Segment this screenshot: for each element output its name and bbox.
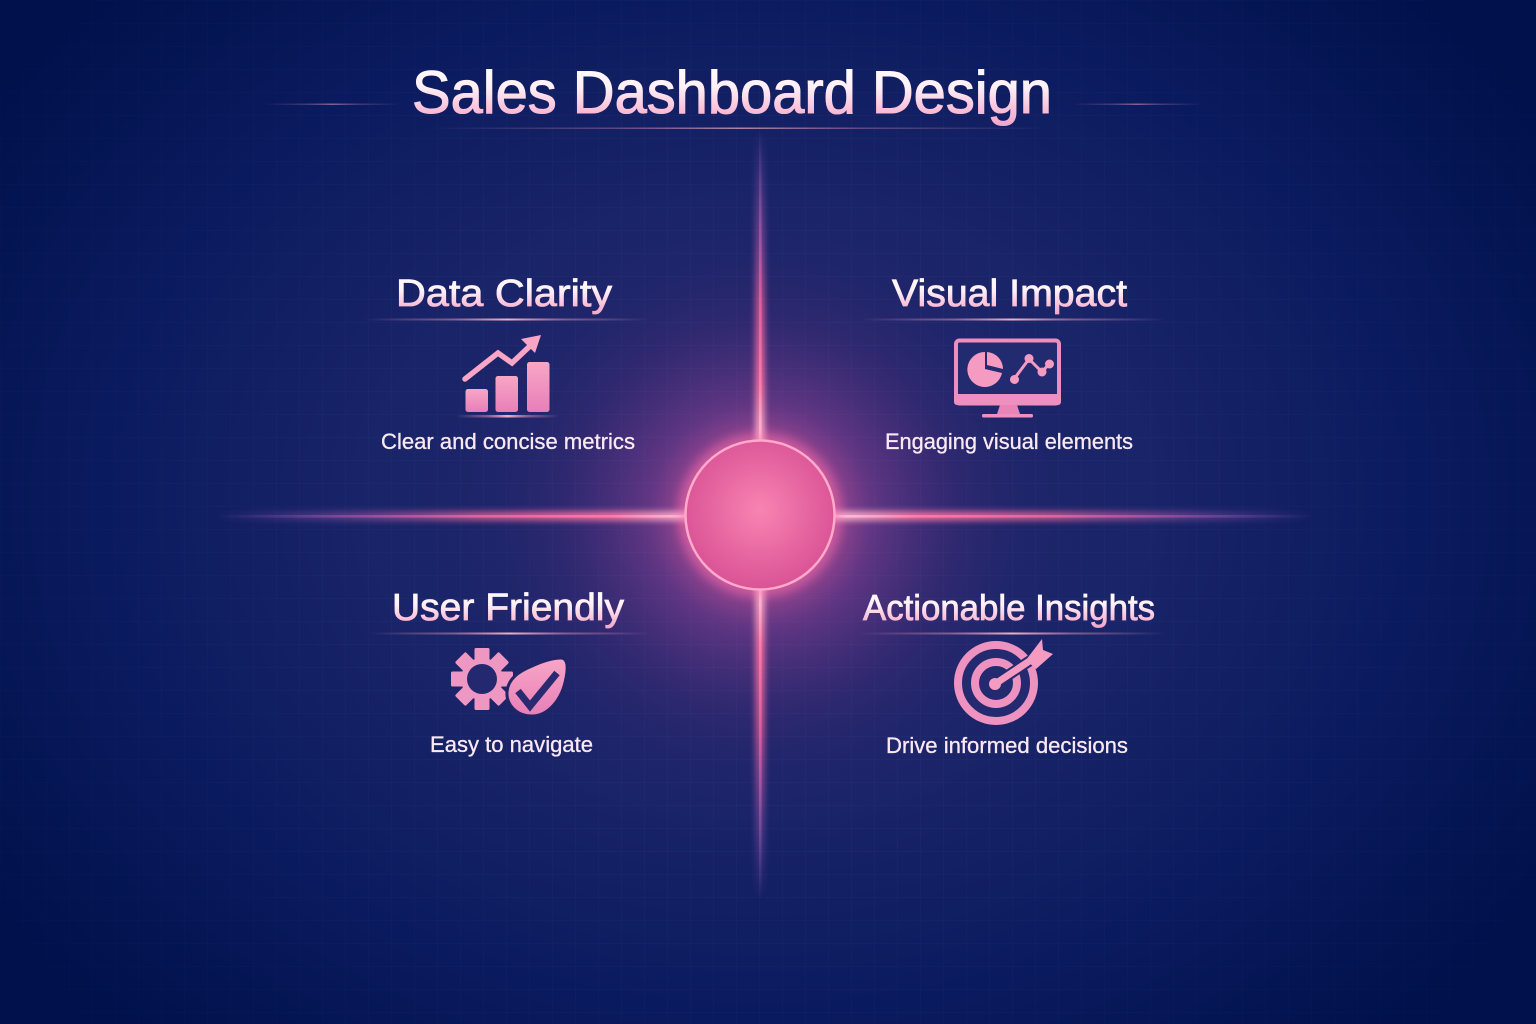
text: Drive informed decisions: Drive informed decisions <box>886 733 1128 758</box>
panel: Data Clarity <box>365 273 650 454</box>
text: Engaging visual elements: Engaging visual elements <box>885 429 1133 454</box>
heading: Actionable Insights: Actionable Insights <box>863 587 1155 628</box>
panel: Visual Impact <box>860 273 1165 454</box>
title text: Sales Dashboard Design <box>412 59 1052 126</box>
central sphere <box>678 433 842 597</box>
heading rule <box>365 318 650 320</box>
title rules <box>265 104 1202 129</box>
icon: target with arrow <box>958 639 1053 721</box>
heading: Data Clarity: Data Clarity <box>396 273 612 315</box>
text: Clear and concise metrics: Clear and concise metrics <box>381 429 635 454</box>
heading rule <box>370 632 650 634</box>
icon: gear and check shield <box>451 648 567 716</box>
text: Easy to navigate: Easy to navigate <box>430 732 593 757</box>
glowing cross connector <box>215 130 1315 900</box>
panel: User Friendly <box>370 587 650 757</box>
heading rule <box>860 318 1165 320</box>
heading: Visual Impact: Visual Impact <box>892 273 1127 315</box>
icon: monitor with charts <box>954 340 1061 418</box>
panel: Actionable Insights <box>860 587 1165 758</box>
icon: rising bar chart <box>456 335 559 418</box>
heading rule <box>860 632 1165 634</box>
heading: User Friendly: User Friendly <box>392 587 624 629</box>
